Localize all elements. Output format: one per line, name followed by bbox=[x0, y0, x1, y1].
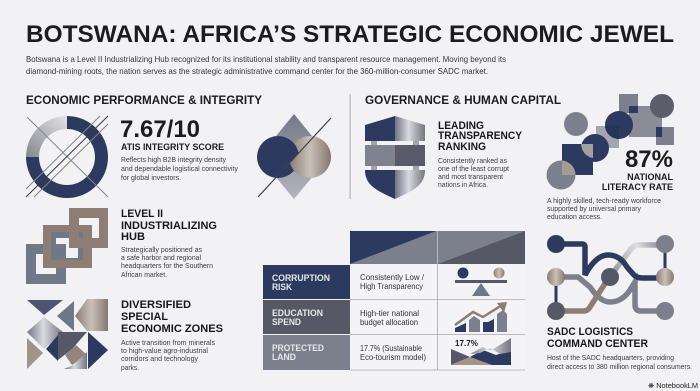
row: education spend: SPEND bbox=[272, 317, 301, 327]
text: SADC logistics command center: COMMAND CENTER bbox=[547, 338, 648, 350]
text: SADC logistics command center: SADC LOGISTICS bbox=[547, 326, 633, 338]
text: literacy description: supported by universal primary bbox=[547, 204, 641, 213]
row: corruption risk: RISK bbox=[272, 282, 293, 292]
row: education spend: EDUCATION bbox=[272, 308, 323, 318]
text: leading transparency ranking bbox=[438, 120, 523, 189]
text: leading transparency ranking: Consistently ranked as bbox=[438, 156, 507, 165]
text: diversified special economic zones: corridors and technology bbox=[121, 354, 198, 363]
icon: transparency shield bbox=[365, 116, 425, 199]
text: literacy description bbox=[547, 196, 661, 221]
text: leading transparency ranking: one of the least corrupt bbox=[438, 164, 509, 173]
text: literacy description: education access. bbox=[547, 212, 602, 221]
stat: national literacy rate: LITERACY RATE bbox=[602, 182, 673, 192]
heading: governance: GOVERNANCE & HUMAN CAPITAL bbox=[365, 93, 561, 107]
stat: ATIS integrity score: ATIS INTEGRITY SCORE bbox=[121, 142, 224, 152]
text: SADC logistics command center: direct access to 380 million regional consumers. bbox=[547, 362, 692, 371]
text: level II industrializing hub: LEVEL II bbox=[121, 208, 163, 220]
text: leading transparency ranking: nations in Africa. bbox=[438, 180, 488, 189]
section divider bbox=[350, 94, 351, 199]
text: leading transparency ranking: and most transparent bbox=[438, 172, 503, 181]
row: education spend: budget allocation bbox=[360, 317, 418, 327]
text: literacy description: A highly skilled, tech-ready workforce bbox=[547, 196, 661, 205]
row: protected land: LAND bbox=[272, 352, 296, 362]
NotebookLM watermark: ❋ NotebookLM bbox=[648, 382, 698, 390]
text: diversified special economic zones bbox=[121, 299, 223, 372]
text: level II industrializing hub: INDUSTRIALIZING bbox=[121, 220, 217, 232]
stat: ATIS integrity score: Reflects high B2B integrity density bbox=[121, 155, 226, 164]
row: protected land bbox=[272, 343, 426, 362]
intro text: Botswana is a Level II Industrializing Hub recognized for its institutional stability and transparent resource management. Moving beyond its bbox=[26, 54, 506, 64]
text: leading transparency ranking: TRANSPARENCY bbox=[438, 130, 523, 142]
stat: ATIS integrity score bbox=[120, 116, 238, 182]
text: diversified special economic zones: to high-value agro-industrial bbox=[121, 346, 208, 355]
text: diversified special economic zones: SPECIAL bbox=[121, 311, 168, 323]
icon: interlocking square frames bbox=[26, 208, 108, 284]
stat: ATIS integrity score: and dependable logistical connectivity bbox=[121, 164, 238, 173]
row: corruption risk: CORRUPTION bbox=[272, 273, 330, 283]
comparison table bbox=[263, 231, 525, 370]
text: level II industrializing hub: African market. bbox=[121, 270, 167, 279]
icon: literacy geometric cluster bbox=[546, 94, 674, 190]
text: SADC logistics command center bbox=[547, 326, 692, 371]
text: diversified special economic zones: Active transition from minerals bbox=[121, 338, 215, 347]
row: corruption risk: High Transparency bbox=[360, 281, 424, 291]
text: diversified special economic zones: ECONOMIC ZONES bbox=[121, 323, 223, 335]
text: level II industrializing hub: headquarters for the Southern bbox=[121, 261, 213, 270]
row: protected land: 17.7% (Sustainable bbox=[360, 343, 422, 353]
stat: national literacy rate bbox=[602, 146, 674, 192]
text: diversified special economic zones: parks. bbox=[121, 363, 139, 372]
intro text bbox=[26, 54, 506, 76]
row: protected land: PROTECTED bbox=[272, 343, 324, 353]
stat: ATIS integrity score: 7.67/10 bbox=[120, 116, 200, 143]
title: BOTSWANA: AFRICA’S STRATEGIC ECONOMIC JEWEL bbox=[26, 21, 674, 48]
row: protected land: Eco-tourism model) bbox=[360, 352, 426, 362]
text: leading transparency ranking: LEADING bbox=[438, 120, 484, 132]
row: corruption risk: Consistently Low / bbox=[360, 272, 425, 282]
icon: integrity donut bbox=[26, 116, 108, 198]
icon: protected land mountains: 17.7% bbox=[455, 339, 478, 348]
heading: economic performance: ECONOMIC PERFORMANCE & INTEGRITY bbox=[26, 93, 262, 107]
icon: protected land mountains bbox=[451, 338, 511, 365]
text: level II industrializing hub bbox=[121, 208, 217, 279]
text: level II industrializing hub: a safe harbor and regional bbox=[121, 253, 201, 262]
icon: rising bar chart bbox=[455, 302, 507, 332]
stat: national literacy rate: NATIONAL bbox=[627, 172, 674, 182]
row: education spend bbox=[272, 308, 419, 327]
icon: SADC logistics network bbox=[547, 235, 674, 320]
text: leading transparency ranking: RANKING bbox=[438, 141, 486, 153]
text: diversified special economic zones: DIVERSIFIED bbox=[121, 299, 191, 311]
intro text: diamond-mining roots, the nation serves as the strategic administrative command center for the 360-million-consumer SADC market. bbox=[26, 66, 488, 76]
icon: diamond and circles bbox=[257, 114, 331, 199]
text: level II industrializing hub: HUB bbox=[121, 231, 145, 243]
icon: balance scale bbox=[455, 268, 507, 296]
stat: national literacy rate: 87% bbox=[625, 146, 673, 173]
stat: ATIS integrity score: for global investors. bbox=[121, 173, 181, 182]
text: SADC logistics command center: Host of the SADC headquarters, providing bbox=[547, 353, 674, 362]
row: education spend: High-tier national bbox=[360, 308, 419, 318]
icon: special economic zones tangram bbox=[27, 299, 108, 369]
row: corruption risk bbox=[272, 272, 425, 292]
text: level II industrializing hub: Strategically positioned as bbox=[121, 245, 202, 254]
